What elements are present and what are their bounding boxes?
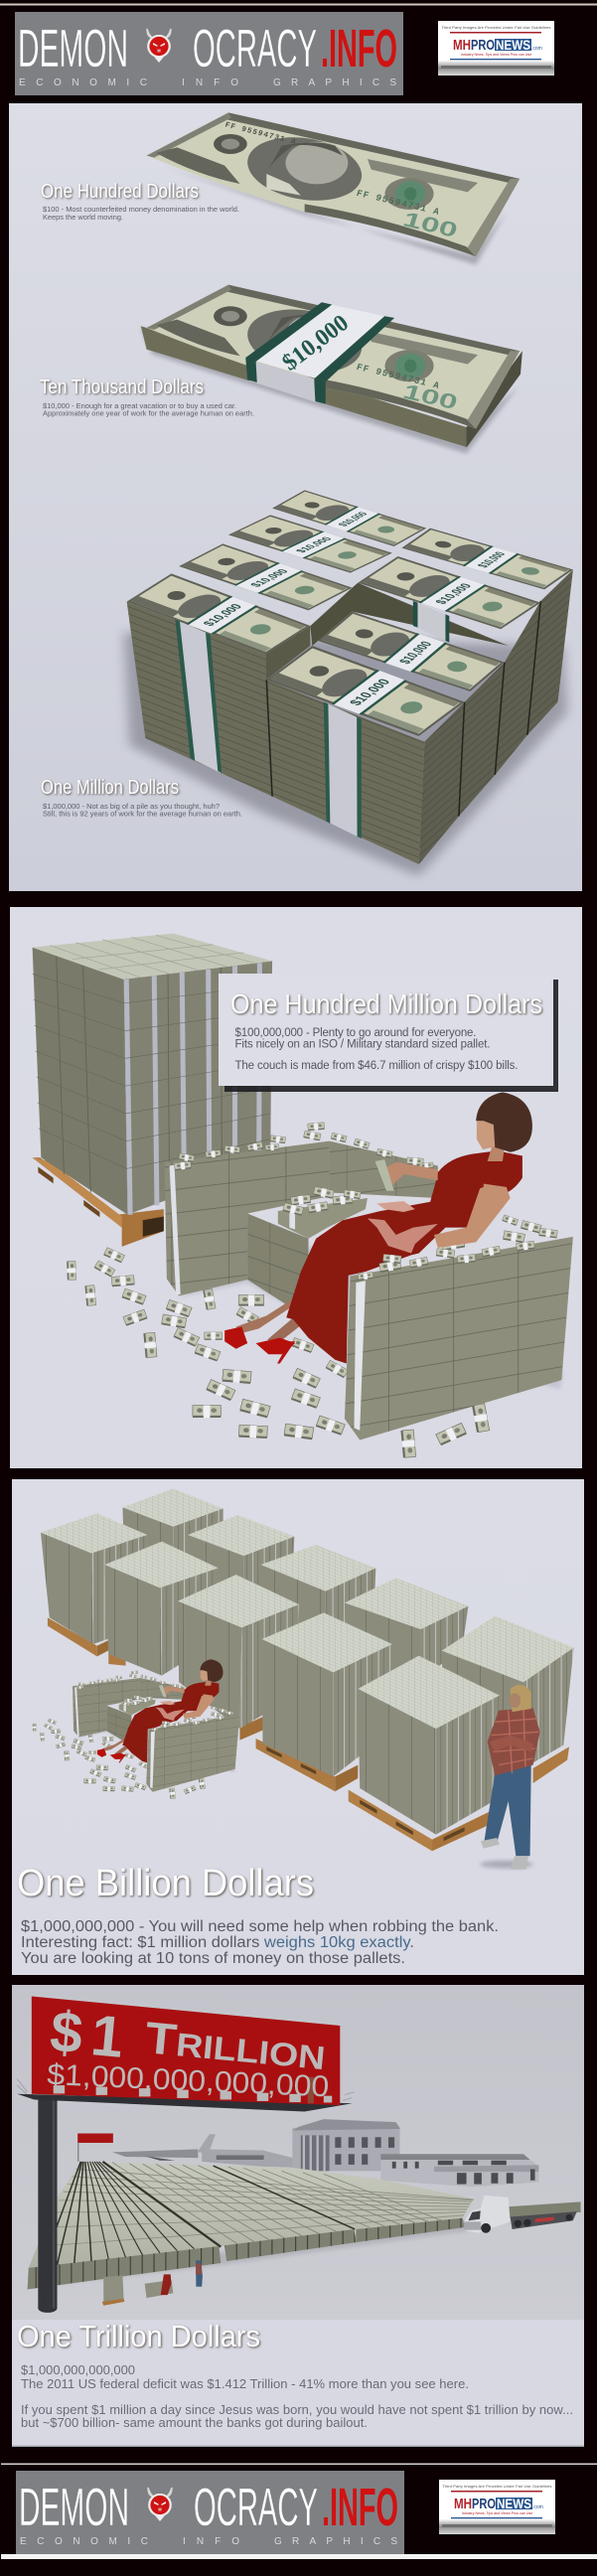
footer: demon-ocracy logo: DEMON xyxy=(19,2478,129,2537)
text block: ten thousand dollars: $10,000 - Enough for a great vacation or to buy a used car. xyxy=(43,401,236,410)
header: MHProNews badge: Third Party Images Are Provided Under Fair Use Guidelines xyxy=(441,25,550,30)
footer: MHProNews badge: MH xyxy=(454,2496,472,2512)
header: demon-ocracy logo: ECONOMIC xyxy=(19,77,147,88)
footer: MHProNews badge: .com xyxy=(532,2504,543,2510)
header: MHProNews badge: NEWS xyxy=(496,37,530,53)
footer: demon-ocracy logo: INFO xyxy=(183,2536,239,2547)
pallet of money xyxy=(33,934,272,1247)
callout: one hundred million dollars xyxy=(219,974,558,1092)
miniature woman on money couch xyxy=(33,1659,239,1799)
man in plaid shirt xyxy=(480,1685,540,1870)
icon: single hundred dollar bill: FF 95594731 A xyxy=(224,122,297,147)
field of money pallets xyxy=(23,2162,476,2289)
icon: one million dollar stack: $10,000 xyxy=(336,511,371,528)
text block: one million dollars: One Million Dollars xyxy=(41,777,179,799)
panel: one trillion dollars xyxy=(12,1985,584,2447)
icon: ten thousand dollar bundle: 100 xyxy=(400,379,461,414)
text block: one billion dollars: One Billion Dollars xyxy=(17,1863,314,1904)
icon: one million dollar stack: $10,000 xyxy=(248,568,292,588)
billboard post xyxy=(38,2098,57,2313)
callout: one hundred million dollars: $100,000,000 - Plenty to go around for everyone. xyxy=(234,1027,477,1039)
icon: one million dollar stack: $10,000 xyxy=(201,602,246,628)
text block: one trillion dollars: The 2011 US federal deficit was $1.412 Trillion - 41% more than you see here. xyxy=(21,2376,469,2391)
footer: MHProNews badge xyxy=(439,2480,555,2534)
header: MHProNews badge xyxy=(438,21,554,76)
icon: one million dollar stack: $10,000 xyxy=(396,640,435,666)
icon: ten thousand dollar bundle xyxy=(141,285,522,454)
header: MHProNews badge: MH xyxy=(453,37,471,54)
callout: one hundred million dollars: The couch is made from $46.7 million of crispy $100 bills. xyxy=(234,1060,519,1072)
text block: ten thousand dollars xyxy=(40,377,254,417)
footer: demon-ocracy logo: ECONOMIC xyxy=(20,2536,148,2547)
panel: one billion dollars xyxy=(12,1479,584,1975)
bundle strap label: $10,000 xyxy=(278,310,354,377)
billboard text: $1 xyxy=(48,1999,135,2071)
header: MHProNews badge: Industry News, Tips and Views Pros can Use xyxy=(461,53,531,57)
text block: one trillion dollars: One Trillion Dollars xyxy=(17,2319,260,2353)
icon: one million dollar stack: $10,000 xyxy=(346,677,393,707)
text block: one million dollars xyxy=(41,777,242,819)
top rule xyxy=(0,4,597,6)
header: demon-ocracy logo: INFO xyxy=(182,77,238,88)
text block: one hundred dollars: Keeps the world moving. xyxy=(43,213,123,222)
small pallet, couch and man xyxy=(102,2260,203,2306)
header: MHProNews badge: .com xyxy=(531,46,542,52)
text block: one million dollars: $1,000,000 - Not as big of a pile as you thought, huh? xyxy=(43,802,220,811)
billboard text: TRILLION xyxy=(143,2012,328,2079)
text block: one hundred dollars: One Hundred Dollars xyxy=(41,181,199,203)
footer rule xyxy=(1,2464,597,2465)
callout: one hundred million dollars: Fits nicely on an ISO / Military standard sized pallet. xyxy=(234,1039,491,1051)
icon: one million dollar stack: $10,000 xyxy=(294,536,336,554)
footer: demon-ocracy logo: .INFO xyxy=(322,2478,398,2537)
header: demon-ocracy logo xyxy=(15,12,403,95)
icon: one million dollar stack: $10,000 xyxy=(476,551,510,569)
icon: single hundred dollar bill: 100 xyxy=(400,208,461,241)
footer: MHProNews badge: Third Party Images Are Provided Under Fair Use Guidelines xyxy=(443,2484,552,2489)
text block: one hundred dollars xyxy=(41,181,239,222)
footer: MHProNews badge: Industry News, Tips and Views Pros can Use xyxy=(462,2511,532,2515)
icon: single hundred dollar bill xyxy=(147,112,520,265)
trillion scene xyxy=(17,1996,581,2313)
panel: one hundred to one million dollars xyxy=(9,103,582,891)
icon: devil xyxy=(148,2488,172,2521)
text block: one billion dollars: You are looking at 10 tons of money on those pallets. xyxy=(21,1950,405,1967)
side building xyxy=(380,2154,538,2187)
airplane xyxy=(112,2134,216,2161)
big red billboard xyxy=(17,1996,354,2112)
billboard text xyxy=(47,1999,330,2103)
footer: MHProNews badge: PRO xyxy=(472,2496,496,2512)
woman on money couch xyxy=(67,1092,573,1457)
footer: demon-ocracy logo: OCRACY xyxy=(194,2478,318,2537)
header: demon-ocracy logo: OCRACY xyxy=(193,19,317,78)
text block: ten thousand dollars: Approximately one year of work for the average human on earth. xyxy=(43,409,254,417)
text block: one trillion dollars: If you spent $1 million a day since Jesus was born, you would have not spent $1 trillion by now... xyxy=(21,2402,573,2417)
text block: one trillion dollars xyxy=(17,2319,573,2430)
distant billboard xyxy=(77,2133,113,2162)
header: demon-ocracy logo: DEMON xyxy=(18,19,128,78)
footer white rule xyxy=(1,2554,597,2559)
panel: one hundred million dollars xyxy=(10,907,582,1468)
text block: one trillion dollars: but ~$700 billion- same amount the banks got during bailout. xyxy=(21,2415,368,2430)
text block: one trillion dollars: $1,000,000,000,000 xyxy=(21,2362,135,2377)
icon: devil xyxy=(147,29,171,63)
text block: one million dollars: Still, this is 92 years of work for the average human on earth. xyxy=(43,809,242,819)
header: demon-ocracy logo: .INFO xyxy=(321,19,397,78)
icon: one million dollar stack: $10,000 xyxy=(433,582,475,606)
header: MHProNews badge: PRO xyxy=(471,37,495,54)
icon: single hundred dollar bill: FF 95594731 A xyxy=(355,188,441,218)
footer: demon-ocracy logo: GRAPHICS xyxy=(274,2536,397,2547)
footer: MHProNews badge: NEWS xyxy=(497,2496,531,2511)
text block: one hundred dollars: $100 - Most counterfeited money denomination in the world. xyxy=(43,205,239,214)
callout: one hundred million dollars: One Hundred Million Dollars xyxy=(230,988,542,1019)
white house xyxy=(202,2119,400,2171)
ten pallets of money xyxy=(33,1488,574,1870)
icon: ten thousand dollar bundle: FF 95594731 A xyxy=(355,362,441,391)
billboard text: $1,000,000,000,000 xyxy=(47,2058,330,2103)
footer: demon-ocracy logo xyxy=(16,2471,404,2554)
text block: ten thousand dollars: Ten Thousand Dollars xyxy=(40,377,204,398)
truck carrying money xyxy=(464,2196,581,2233)
text block: one billion dollars: $1,000,000,000 - You will need some help when robbing the bank. xyxy=(21,1918,499,1935)
header: demon-ocracy logo: GRAPHICS xyxy=(273,77,396,88)
text block: one billion dollars xyxy=(17,1863,499,1967)
icon: one million dollar stack xyxy=(124,490,573,876)
text block: one billion dollars: Interesting fact: $1 million dollars weighs 10kg exactly . xyxy=(21,1934,414,1951)
